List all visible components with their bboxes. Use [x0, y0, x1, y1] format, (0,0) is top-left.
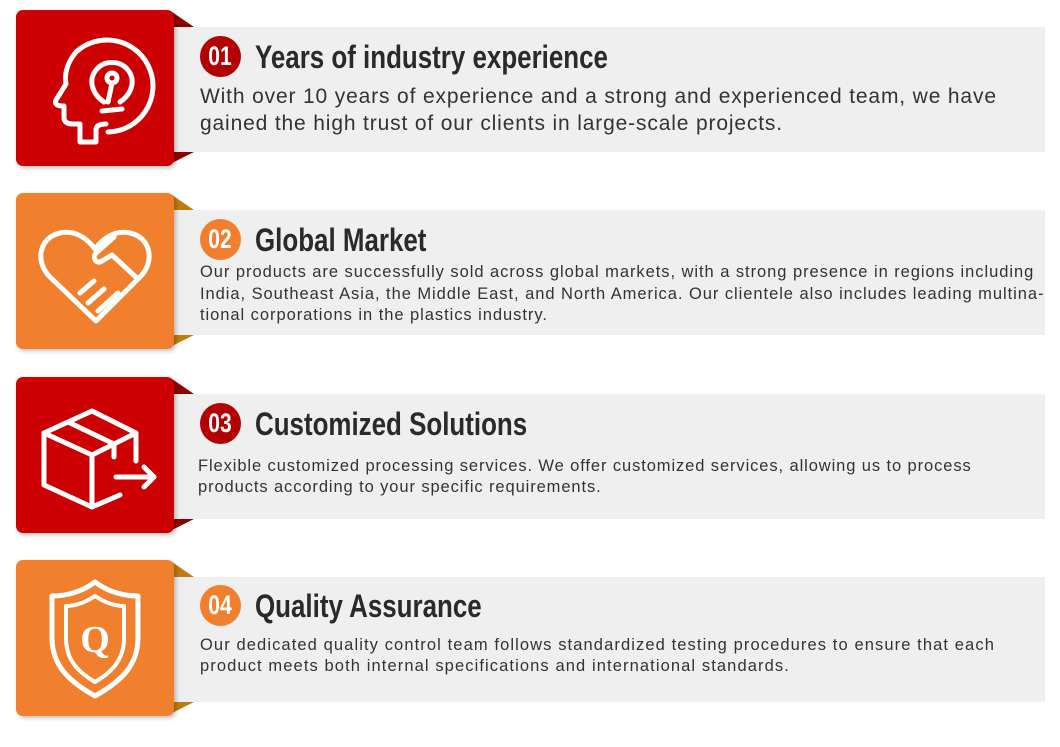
grey panel: [174, 210, 1045, 335]
fold bottom: [172, 152, 194, 163]
title: [200, 585, 482, 626]
body text: [198, 457, 972, 496]
body text: India, Southeast Asia, the Middle East, and North America. Our clientele also includes leading multina-: [200, 284, 1044, 302]
body text: [200, 636, 995, 675]
body text: [200, 263, 1044, 324]
row 1: industry experience: 01: [209, 41, 232, 71]
fold bottom: [172, 519, 194, 530]
row 4: quality assurance: Quality Assurance: [255, 588, 482, 624]
row 4: quality assurance: 04: [209, 590, 232, 620]
body text: tional corporations in the plastics industry.: [200, 306, 548, 324]
body text: [200, 85, 997, 135]
icon box: head with lightbulb: [16, 10, 174, 166]
fold top: [172, 379, 194, 394]
title: [200, 403, 527, 444]
fold top: [172, 562, 194, 577]
row 3: customized solutions: Customized Solutions: [255, 406, 527, 442]
title: [200, 219, 426, 260]
row 3: customized solutions: [16, 376, 1045, 538]
icon box: heart handshake: [16, 193, 174, 349]
grey panel: [174, 394, 1045, 519]
fold bottom: [172, 335, 194, 346]
icon box: package with arrow: [16, 377, 174, 533]
body text: Our dedicated quality control team follows standardized testing procedures to ensure that each: [200, 636, 995, 654]
grey panel: [174, 27, 1045, 152]
body text: With over 10 years of experience and a strong and experienced team, we have: [200, 85, 997, 108]
fold bottom: [172, 702, 194, 713]
fold top: [172, 195, 194, 210]
body text: product meets both internal specifications and international standards.: [200, 657, 790, 675]
body text: products according to your specific requirements.: [198, 478, 602, 496]
row 1: industry experience: Years of industry experience: [255, 39, 608, 75]
row 4: quality assurance: [16, 560, 1045, 720]
body text: Flexible customized processing services. We offer customized services, allowing us to process: [198, 457, 972, 475]
body text: gained the high trust of our clients in large-scale projects.: [200, 112, 783, 135]
grey panel: [174, 577, 1045, 702]
fold top: [172, 12, 194, 27]
row 3: customized solutions: 03: [209, 408, 232, 438]
title: [200, 36, 608, 77]
row 2: global market: [16, 192, 1045, 354]
row 2: global market: Global Market: [255, 222, 426, 258]
row 2: global market: 02: [209, 224, 232, 254]
icon box: Q shield: [16, 560, 174, 716]
row 1: industry experience: [16, 10, 1045, 170]
body text: Our products are successfully sold across global markets, with a strong presence in regions including: [200, 263, 1034, 281]
icon box: Q shield: Q: [80, 619, 110, 661]
